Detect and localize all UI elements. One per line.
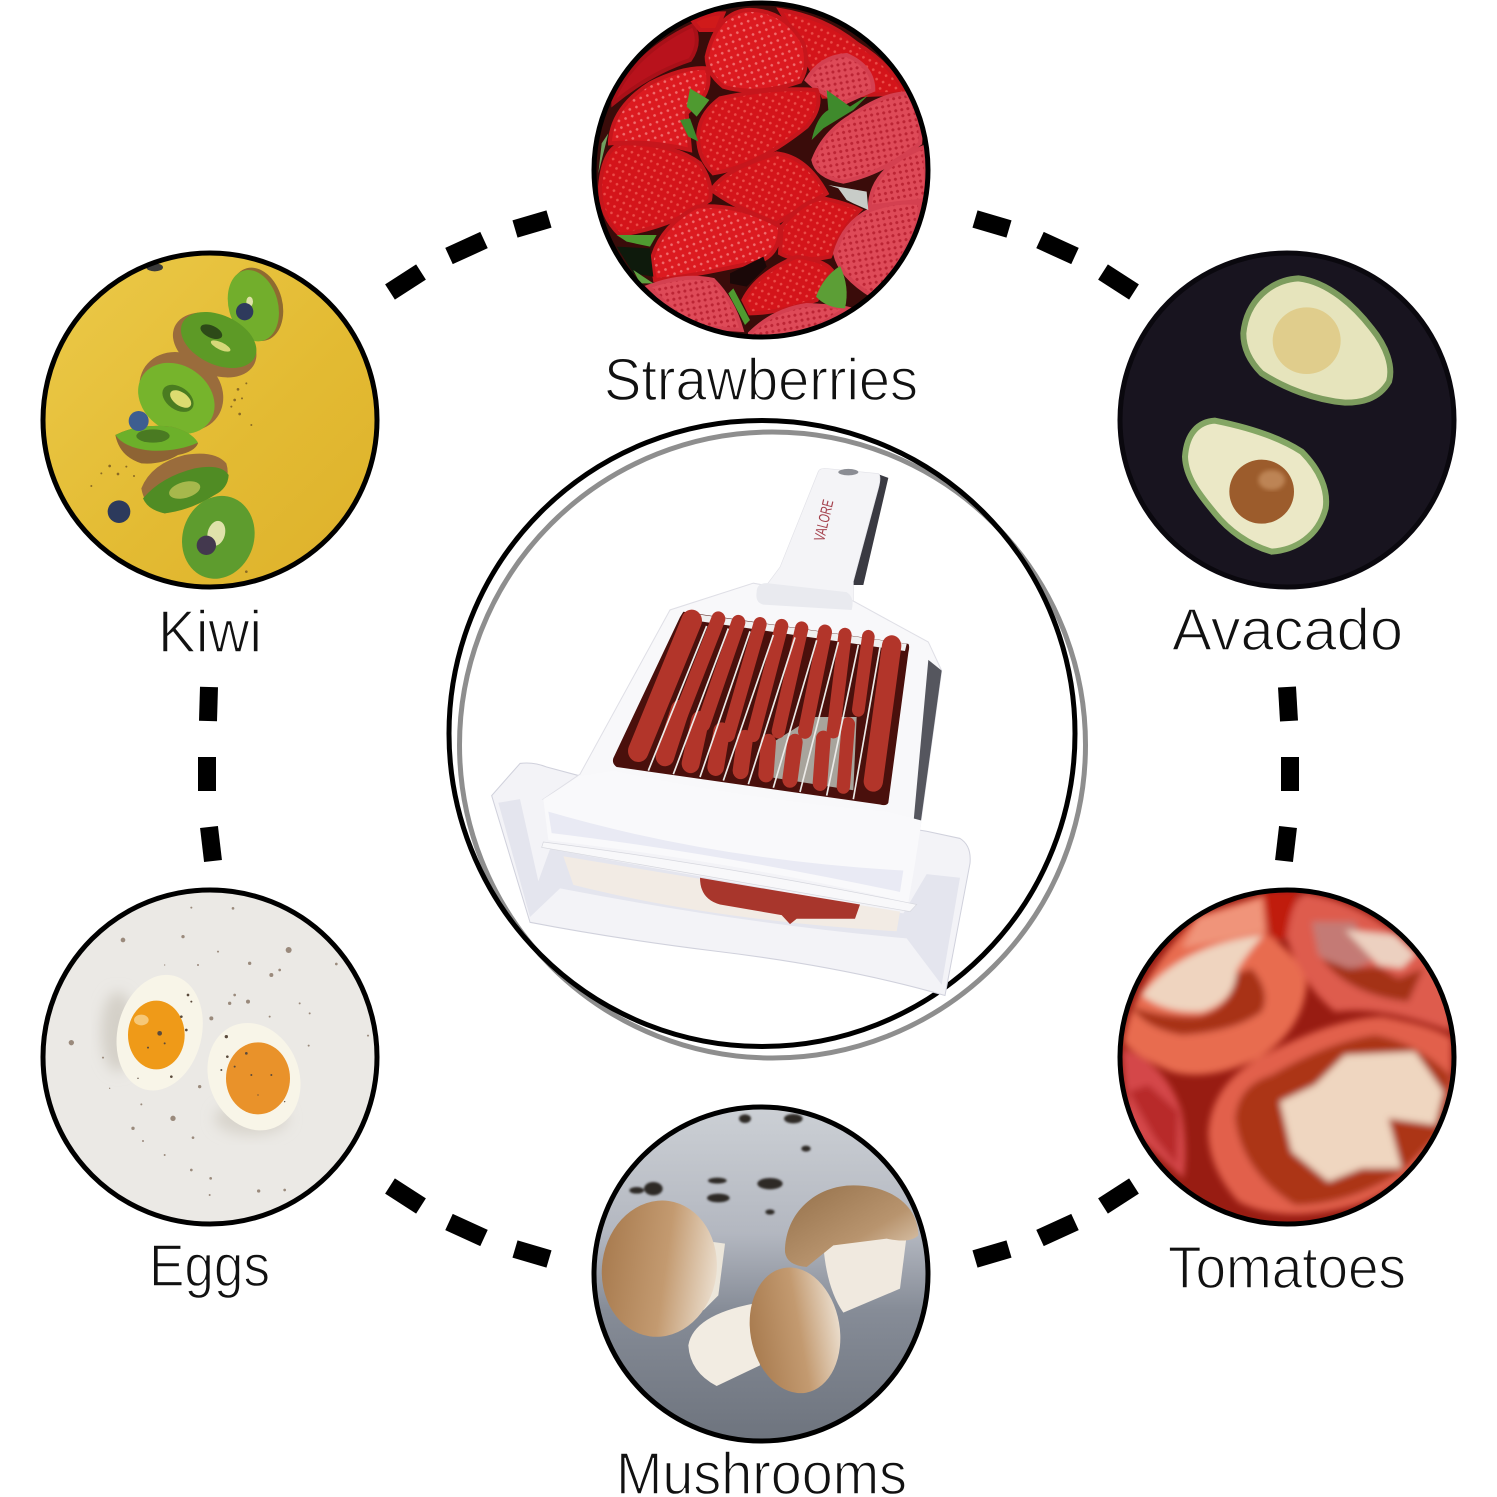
panel: mushrooms photo [590, 1102, 937, 1449]
brand text: VALORE [812, 498, 837, 543]
white back strip [683, 613, 907, 651]
mushroom right [823, 1235, 907, 1313]
dashed ring connecting the photos [207, 219, 1290, 1259]
cutting wires [648, 626, 880, 799]
drawer red tab [700, 878, 860, 924]
label: Strawberries: Strawberries [604, 347, 918, 413]
mushroom front [688, 1304, 760, 1386]
slicer front lip [543, 771, 922, 903]
mushroom left [703, 1242, 725, 1310]
slicer handle [850, 474, 888, 585]
slicer drawer [542, 842, 917, 912]
panel: strawberries photo [590, 0, 937, 347]
blade window [613, 612, 909, 805]
label: Tomatoes: Tomatoes [1168, 1235, 1406, 1301]
label: Kiwi: Kiwi [158, 599, 262, 665]
panel: eggs photo [38, 885, 385, 1232]
slicer base frame [492, 763, 970, 996]
label: Avacado: Avacado [1172, 597, 1403, 663]
panel: avocado photo [1115, 250, 1462, 597]
panel: center product ring [449, 420, 1086, 1058]
product: slicer [492, 468, 970, 996]
panel: tomatoes photo [1115, 885, 1462, 1232]
label: Eggs: Eggs [149, 1233, 270, 1299]
slicer top plate [543, 583, 942, 828]
kiwi slices [237, 268, 284, 341]
red blades [638, 619, 892, 787]
panel: kiwi photo [38, 250, 385, 597]
